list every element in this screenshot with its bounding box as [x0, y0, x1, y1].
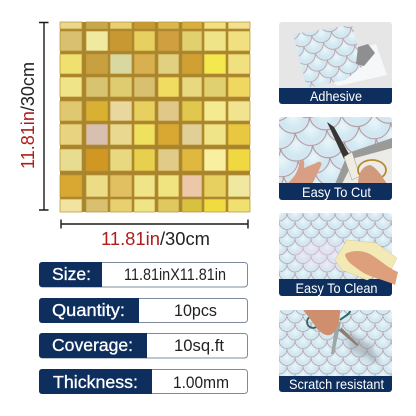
spec row: size: 11.81inX11.81in — [124, 265, 226, 284]
hand wiping — [345, 251, 398, 285]
spec row: quantity: 10pcs — [174, 301, 217, 320]
tile image: gold mosaic sheet — [60, 22, 250, 212]
yellow cloth — [335, 240, 397, 280]
spec row: quantity: Quantity: — [52, 300, 125, 320]
hand — [303, 310, 340, 335]
spec row: size: Size: — [52, 264, 91, 284]
spec row: coverage: Coverage: — [52, 335, 133, 355]
scissors shadow — [345, 330, 380, 365]
adhesive label: Adhesive — [310, 88, 362, 104]
scissors — [327, 122, 386, 180]
spec row: thickness: 1.00mm — [173, 373, 229, 392]
spec row: quantity — [39, 298, 248, 323]
scissors — [307, 311, 359, 354]
spec row: coverage — [39, 333, 248, 358]
horizontal dimension line — [61, 220, 248, 228]
cut-away shadow area — [335, 138, 392, 184]
vertical dimension line — [39, 22, 48, 210]
spec row: coverage: 10sq.ft — [174, 336, 224, 355]
scale sheet — [293, 25, 366, 88]
grey peeled corner — [356, 44, 375, 66]
spec row: thickness — [39, 369, 248, 394]
panel: scratch resistant — [279, 310, 392, 392]
left hand — [287, 160, 321, 184]
panel: easy to cut — [279, 117, 392, 200]
scratch resistant label: Scratch resistant — [289, 376, 384, 392]
panel: easy to clean — [279, 213, 398, 296]
white backing sheet — [330, 44, 387, 86]
vertical dimension label: 11.81in/30cm — [17, 62, 38, 169]
spec row: thickness: Thickness: — [53, 372, 138, 392]
panel: adhesive — [279, 22, 392, 104]
right hand — [358, 165, 387, 184]
easy to cut label: Easy To Cut — [302, 184, 371, 200]
pastel sheen — [294, 240, 342, 270]
easy to clean label: Easy To Clean — [296, 280, 378, 296]
spec row: size — [39, 262, 248, 287]
horizontal dimension label: 11.81in/30cm — [101, 228, 210, 249]
